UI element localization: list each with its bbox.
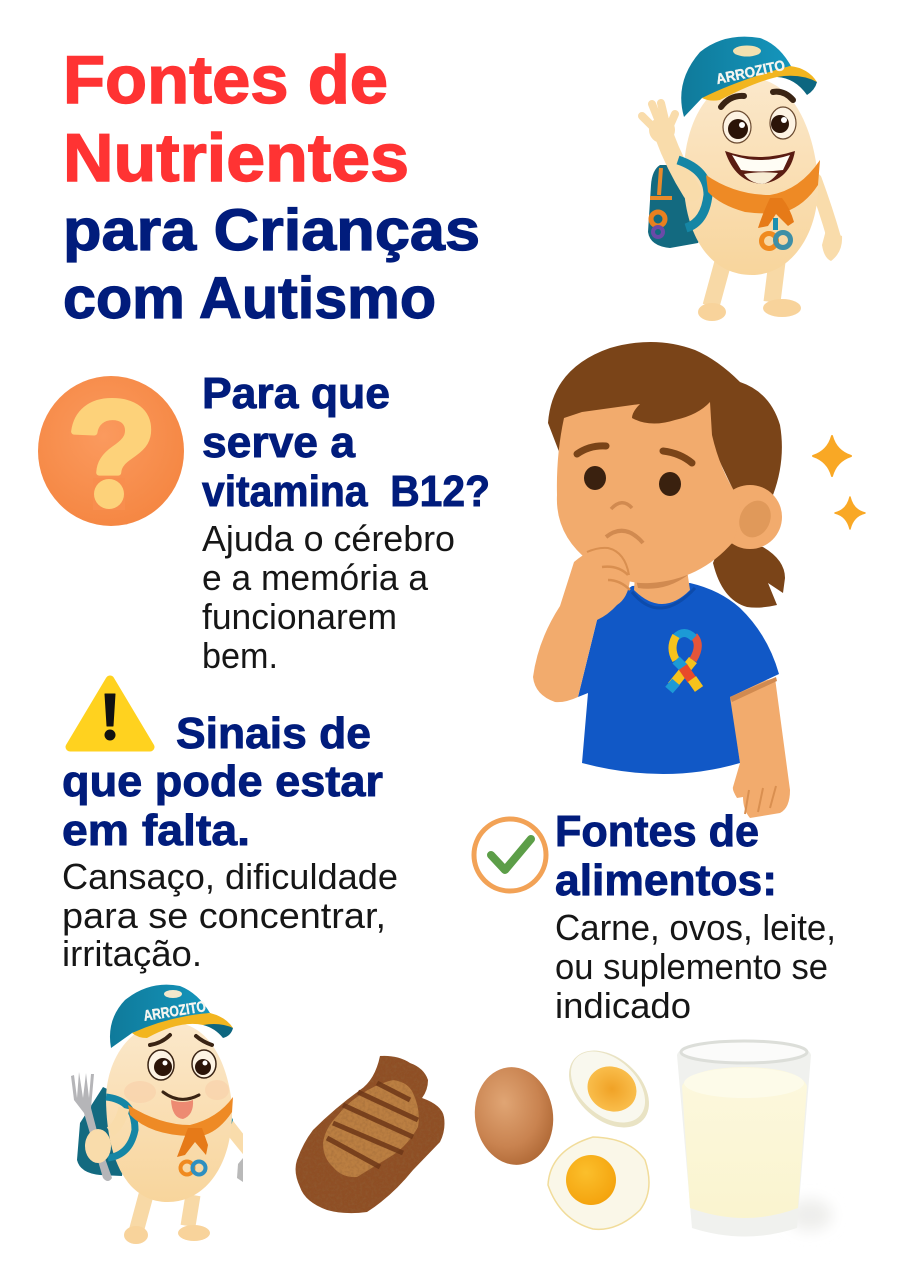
food: steak: [296, 1056, 444, 1213]
title: Nutrientes: [63, 120, 409, 196]
mascot: hungry Arrozito with fork: ARROZITO: [142, 998, 207, 1025]
brows, eyes, nose, mouth: [577, 446, 606, 454]
section: warning signs: para se concentrar,: [62, 895, 386, 936]
hair back: [548, 342, 782, 500]
sparkles: [813, 436, 865, 529]
section: vitamin B12: serve a: [202, 418, 356, 467]
backpack: [648, 165, 712, 248]
title: para Crianças: [63, 198, 480, 263]
backpack: [77, 1087, 122, 1176]
icon: warning triangle: [70, 680, 150, 747]
icon: question mark: [38, 371, 184, 534]
body: [106, 1022, 232, 1202]
section: vitamin B12: bem.: [202, 635, 278, 676]
food: glass of milk: [677, 1040, 832, 1236]
food: whole egg: [469, 1062, 559, 1170]
right arm: [728, 678, 790, 818]
food: fried egg: [548, 1137, 649, 1229]
shirt: [578, 583, 779, 774]
section: food sources: Fontes de: [555, 807, 759, 856]
character: thinking girl: [533, 342, 790, 818]
title: com Autismo: [63, 266, 436, 331]
food: boiled egg half: [554, 1035, 664, 1143]
section: warning signs: irritação.: [62, 933, 202, 974]
legs: [136, 1195, 193, 1232]
section: warning signs: Cansaço, dificuldade: [62, 856, 398, 897]
body: [684, 78, 818, 275]
section: warning signs: que pode estar: [62, 757, 383, 806]
face: [557, 402, 740, 583]
infinity charm: [180, 1162, 194, 1174]
hand: [110, 1108, 124, 1132]
icon: check mark: [474, 819, 546, 891]
face: [150, 1035, 170, 1045]
mascot: waving Arrozito: [642, 37, 842, 321]
icon: question mark: ?: [67, 371, 157, 534]
right arm and fork stub: [230, 1121, 243, 1154]
mascot: waving Arrozito: ARROZITO: [715, 58, 787, 88]
section: food sources: alimentos:: [555, 856, 777, 905]
fork: [71, 1072, 112, 1181]
mascot: hungry Arrozito with fork: [71, 985, 248, 1244]
section: food sources: [555, 807, 836, 1026]
title: Fontes de: [63, 42, 388, 118]
section: vitamin B12: vitamina B12?: [202, 467, 490, 516]
title: [63, 42, 480, 331]
neck: [634, 570, 690, 604]
section: vitamin B12: [202, 369, 490, 676]
section: vitamin B12: Para que: [202, 369, 390, 418]
strap: [106, 1097, 135, 1158]
section: warning signs: [62, 709, 398, 974]
section: food sources: Carne, ovos, leite,: [555, 907, 836, 948]
section: vitamin B12: e a memória a: [202, 557, 429, 598]
legs: [711, 262, 777, 306]
section: food sources: ou suplemento se: [555, 946, 828, 987]
section: food sources: indicado: [555, 985, 691, 1026]
strap: [678, 160, 708, 228]
bent arm and hand: [533, 548, 630, 702]
section: warning signs: Sinais de: [176, 709, 371, 758]
section: vitamin B12: Ajuda o cérebro: [202, 518, 455, 559]
autism ribbon: [669, 633, 699, 690]
cap: [110, 985, 210, 1048]
cap: [681, 37, 792, 117]
face: [721, 96, 744, 107]
section: vitamin B12: funcionarem: [202, 596, 397, 637]
right arm: [815, 180, 834, 238]
ear: [718, 485, 782, 549]
ponytail: [713, 543, 785, 608]
raised arm and hand: [664, 135, 692, 192]
scarf: [128, 1097, 233, 1136]
scarf: [706, 160, 820, 214]
section: warning signs: em falta.: [62, 806, 250, 855]
infinity charm: [773, 218, 778, 230]
